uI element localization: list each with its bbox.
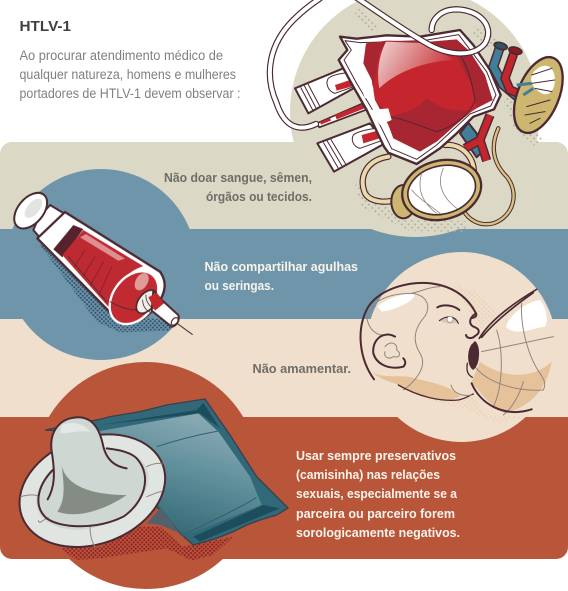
text: always use condoms: parceira ou parceiro forem: [296, 506, 455, 521]
text: do not share needles: [204, 259, 358, 293]
circle: beige behind blood bag: [290, 0, 540, 237]
mouth: [469, 342, 479, 369]
background bands: [0, 142, 568, 559]
text: always use condoms: sorologicamente negativos.: [296, 525, 460, 540]
thin contour lines: [367, 287, 440, 390]
text: do not breastfeed: Não amamentar.: [252, 361, 351, 376]
text: do not share needles: Não compartilhar agulhas: [204, 259, 358, 274]
plunger: [8, 187, 67, 242]
illustration: baby breastfeeding: [361, 283, 553, 423]
icon: kidney: [504, 50, 568, 140]
condom ring: [4, 415, 181, 566]
barrel: [37, 212, 168, 334]
nose: [466, 313, 479, 338]
packet: [45, 399, 288, 545]
intro paragraph: [20, 48, 240, 101]
halftone shading: [423, 283, 523, 423]
circle: rust behind condom: [32, 362, 260, 589]
breast outline: [479, 289, 537, 338]
ear: [373, 335, 405, 368]
hub and tip: [132, 286, 179, 327]
halftone shadow: [60, 527, 233, 561]
icon: bag ports: [295, 68, 385, 172]
illustration: syringe: [8, 187, 193, 335]
text: do not share needles: ou seringas.: [204, 278, 274, 293]
text: always use condoms: (camisinha) nas relações: [296, 467, 440, 482]
title: HTLV-1: [20, 18, 71, 35]
icon: oval organ: [391, 152, 488, 228]
illustration: blood bag and organs: [270, 0, 568, 228]
icon: gold tubes: [363, 128, 514, 224]
breast shading: [472, 362, 552, 413]
head outline: [361, 283, 476, 379]
text: do not donate: Não doar sangue, sêmen,: [164, 170, 312, 185]
highlights: [377, 293, 415, 312]
intro paragraph: qualquer natureza, homens e mulheres: [20, 67, 236, 82]
text: do not donate: órgãos ou tecidos.: [206, 189, 312, 204]
intro paragraph: portadores de HTLV-1 devem observar :: [20, 86, 240, 101]
icon: blood bag: [339, 30, 501, 164]
eye: [439, 316, 458, 324]
baby skin shadow: [372, 372, 460, 399]
circle: blue behind syringe: [6, 169, 196, 360]
needle: [173, 321, 193, 335]
illustration: condom and packet: [4, 399, 288, 566]
text: always use condoms: sexuais, especialmente se a: [296, 486, 458, 501]
intro paragraph: Ao procurar atendimento médico de: [20, 48, 223, 63]
text: do not donate: [164, 170, 312, 204]
icon: white tubes: [270, 0, 488, 128]
text: always use condoms: [296, 448, 460, 540]
jaw: [398, 385, 473, 400]
circle: peach behind baby: [366, 252, 556, 442]
halftone shadow: [357, 12, 540, 227]
condom tip: [38, 417, 145, 526]
icon: red and blue vessels: [460, 41, 532, 161]
eyebrow: [437, 305, 459, 310]
halftone shadow: [40, 243, 177, 332]
text: always use condoms: Usar sempre preservativos: [296, 448, 456, 463]
